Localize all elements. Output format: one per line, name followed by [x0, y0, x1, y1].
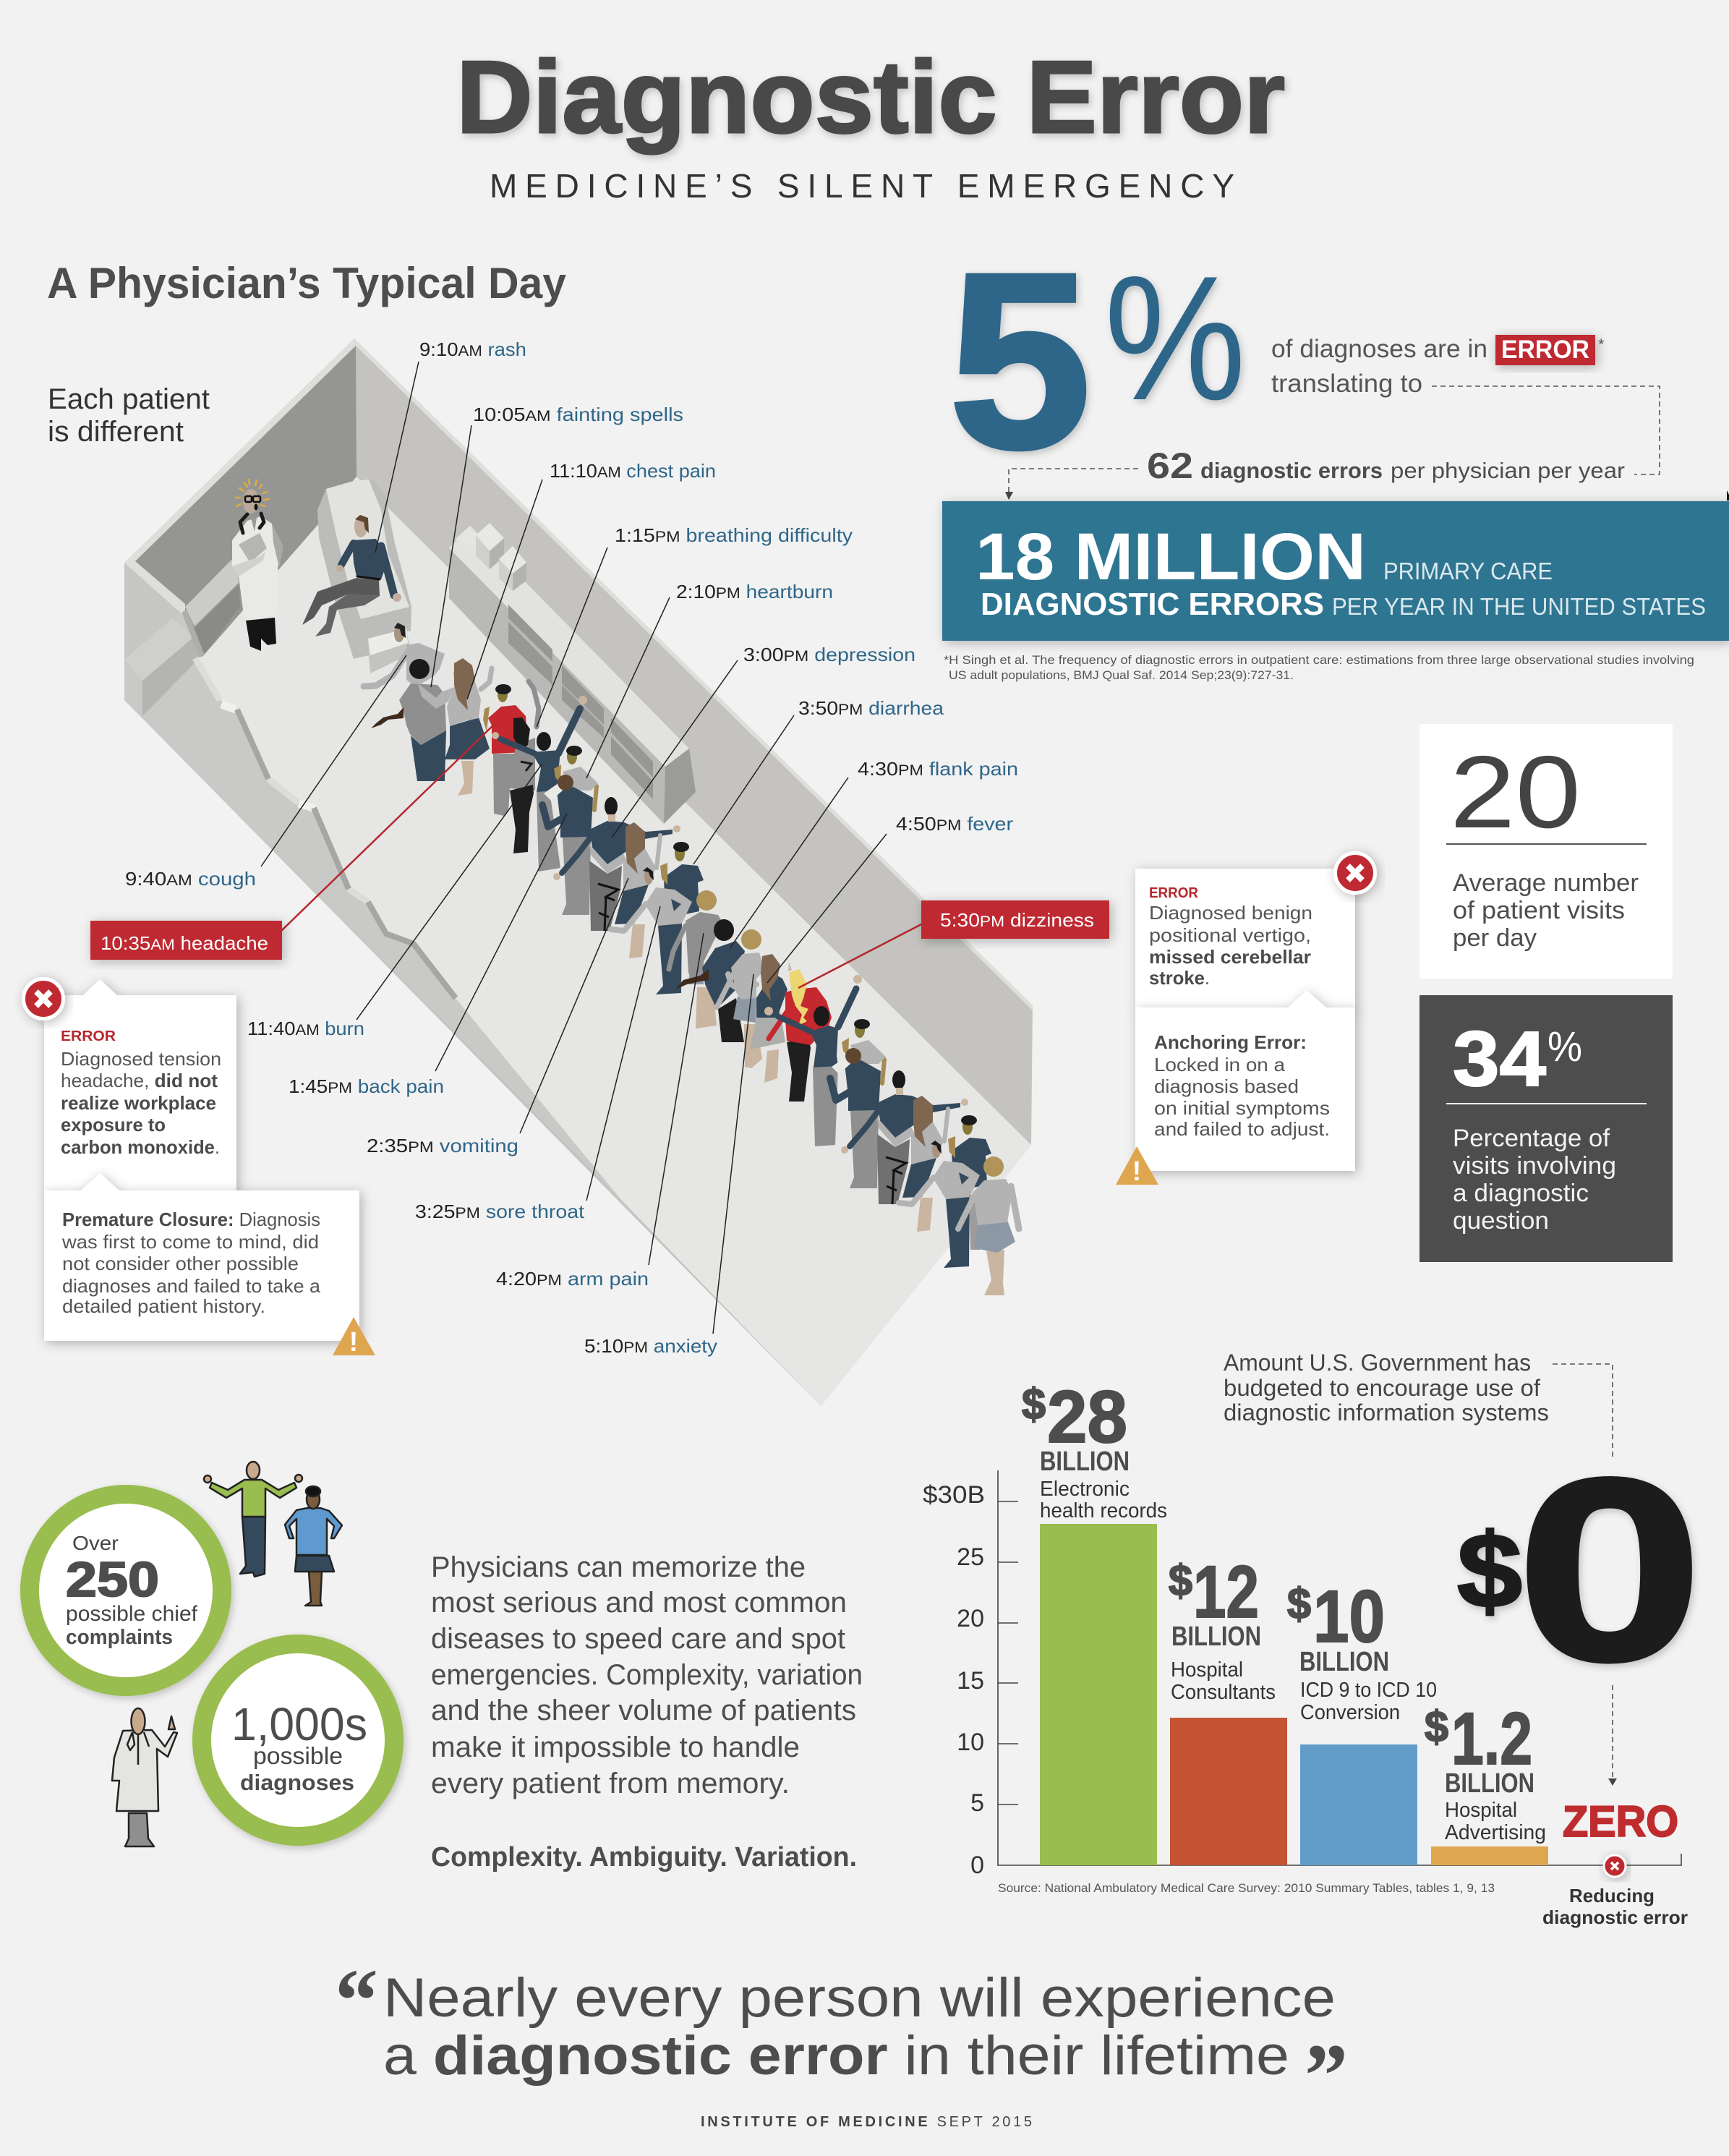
bar: hospital consultants: 12 [1193, 1551, 1259, 1633]
circle: 250 complaints [30, 1494, 222, 1687]
column: zero: ZERO [1563, 1797, 1678, 1846]
paragraph: memorize: most serious and most common [431, 1587, 847, 1619]
text: of diagnoses are in error: of diagnoses are in [1271, 335, 1487, 363]
timeline label: 3:50pm diarrhea [693, 697, 944, 864]
bar: hospital advertising: Advertising [1445, 1821, 1546, 1844]
bar: electronic health records: health records [1040, 1499, 1167, 1522]
timeline label: 4:20pm arm pain: 4:20 PM arm pain [496, 1268, 649, 1290]
banner: 18 million: PER YEAR IN THE UNITED STATES [1332, 593, 1706, 620]
text: amount budgeted: diagnostic information systems [1224, 1399, 1549, 1426]
timeline label: 5:10pm anxiety: 5:10PM anxiety [584, 1335, 717, 1357]
dashed arrow: down to zero [1608, 1685, 1617, 1786]
timeline label: 2:35pm vomiting [367, 878, 628, 1156]
closing quote: a diagnostic error in their lifetime [383, 2025, 1289, 2087]
patient: curly blond grey shirt [669, 890, 723, 1028]
banner: 18 million: 18 MILLION [976, 520, 1366, 594]
circle: 250 complaints: possible chief [66, 1602, 198, 1626]
bar: hospital advertising: 1.2 [1451, 1697, 1532, 1780]
card: anchoring error [1135, 990, 1355, 1171]
text: amount budgeted [1224, 1350, 1549, 1426]
doctor figure [232, 480, 283, 651]
circle: 1000s diagnoses [202, 1644, 394, 1836]
icon: man with arms out [204, 1462, 302, 1577]
big stat: 5 percent [949, 222, 1246, 500]
icon: warning right [1116, 1146, 1158, 1187]
patient: navy arms raised [764, 975, 862, 1146]
patient queue [364, 623, 1019, 1295]
text: each patient is different: is different [48, 416, 184, 448]
bar: hospital advertising: Hospital [1445, 1799, 1517, 1822]
bar: hospital consultants: $ [1169, 1556, 1192, 1605]
patient: navy shirt black pants [675, 919, 745, 1042]
icon: error x left [23, 979, 64, 1018]
stat card: 20 visits: 20 [1450, 735, 1581, 850]
axis and ticks: 15 [957, 1667, 984, 1695]
column: zero: diagnostic error [1542, 1906, 1688, 1928]
bar: icd conversion: ICD 9 to ICD 10 [1300, 1679, 1437, 1702]
bar: icd conversion: Conversion [1300, 1701, 1400, 1724]
card: headache error: exposure to [61, 1114, 166, 1135]
timeline label: 2:10pm heartburn [586, 581, 833, 778]
bar: icd conversion [1287, 1575, 1437, 1865]
paragraph: memorize: every patient from memory. [431, 1768, 790, 1799]
timeline label: 11:10am chest pain: 11:10AM chest pain [550, 460, 716, 482]
stat card: 20 visits: of patient visits [1453, 897, 1625, 924]
closing quote [335, 1951, 1348, 2126]
card: anchoring error: Anchoring Error: [1154, 1031, 1307, 1053]
patient: woman long hair [418, 658, 492, 796]
card: anchoring error: diagnosis based [1154, 1075, 1299, 1097]
circle: 1000s diagnoses: diagnoses [240, 1770, 354, 1795]
card: dizziness error: stroke. [1149, 967, 1210, 989]
card: headache error: Diagnosed tension [61, 1048, 221, 1070]
text: amount budgeted: Amount U.S. Government has [1224, 1350, 1531, 1376]
axis and ticks: 20 [957, 1605, 984, 1632]
timeline label: 4:20pm arm pain [496, 933, 704, 1290]
card: headache error: carbon monoxide. [61, 1136, 220, 1158]
bar: hospital advertising [1425, 1697, 1548, 1865]
repeating patient group [542, 746, 704, 994]
card: premature closure: detailed patient history. [62, 1295, 265, 1317]
callout: 5:30pm dizziness: 5:30PM dizziness [940, 909, 1094, 931]
card: dizziness error: ERROR [1149, 885, 1199, 901]
patient: red shirt [483, 684, 535, 816]
seated patient [302, 515, 401, 636]
card: anchoring error: on initial symptoms [1154, 1097, 1330, 1119]
axis and ticks: $30B [923, 1481, 985, 1509]
stat card: 20 visits: per day [1453, 924, 1537, 952]
bar: electronic health records: $ [1022, 1380, 1046, 1428]
axis and ticks: 25 [957, 1543, 984, 1571]
icon: doctor [112, 1708, 177, 1846]
card: headache error: realize workplace [61, 1092, 216, 1114]
timeline label: 9:10am rash [375, 338, 526, 553]
timeline label: 3:50pm diarrhea: 3:50PM diarrhea [798, 697, 944, 719]
card: anchoring error: and failed to adjust. [1154, 1118, 1330, 1140]
timeline label: 11:10am chest pain [467, 460, 716, 699]
patient: blonde in red, dizziness [769, 962, 832, 1102]
banner: 18 million [942, 490, 1729, 641]
timeline label: 11:40am burn [247, 764, 542, 1039]
circle: 250 complaints: Over [72, 1532, 119, 1554]
bar: hospital consultants: Hospital [1171, 1658, 1243, 1682]
banner: 18 million: PRIMARY CARE [1383, 558, 1553, 584]
card: dizziness error: positional vertigo, [1149, 924, 1311, 946]
bar: hospital advertising: $ [1425, 1703, 1448, 1751]
axis and ticks: 10 [957, 1729, 984, 1756]
patient: blond light shirt [717, 929, 764, 1068]
text: of diagnoses are in error: ERROR [1501, 336, 1589, 364]
exam chair [317, 480, 411, 673]
subtitle: MEDICINE’S SILENT EMERGENCY [490, 167, 1234, 205]
big stat: zero dollars: 0 [1516, 1425, 1703, 1714]
circle: 250 complaints: complaints [66, 1626, 173, 1649]
patient: black pants, long hair [510, 681, 539, 853]
callout: 5:30pm dizziness [798, 900, 1109, 988]
stat card: 34 percent: Percentage of [1453, 1125, 1610, 1152]
card: dizziness error: Diagnosed benign [1149, 902, 1312, 924]
column: zero [1542, 1797, 1688, 1928]
axis and ticks: 5 [970, 1789, 984, 1817]
stat card: 20 visits [1420, 724, 1673, 979]
text: each patient is different [48, 383, 210, 448]
timeline label: 4:50pm fever [767, 813, 1013, 983]
card: dizziness error: missed cerebellar [1149, 946, 1311, 968]
dashed connector: to zero [1553, 1364, 1613, 1459]
timeline label: 4:50pm fever: 4:50PM fever [896, 813, 1013, 835]
paragraph: memorize: and the sheer volume of patients [431, 1695, 856, 1726]
big stat: zero dollars [1457, 1425, 1703, 1714]
timeline label: 4:30pm flank pain [730, 758, 1018, 947]
card: premature closure: was first to come to mind, did [61, 1231, 319, 1253]
timeline label: 3:25pm sore throat: 3:25PM sore throat [415, 1201, 585, 1222]
paragraph: memorize [431, 1551, 863, 1799]
card: dizziness error [1135, 869, 1355, 1010]
bar: electronic health records: 28 [1047, 1376, 1127, 1458]
stat card: 20 visits: Average number [1453, 869, 1639, 897]
timeline label: 5:10pm anxiety [584, 974, 753, 1357]
quote source: INSTITUTE OF MEDICINE SEPT 2015 [701, 2114, 1032, 2130]
card: headache error: headache, did not [61, 1070, 218, 1091]
bar: hospital advertising: BILLION [1445, 1768, 1534, 1799]
timeline label: 3:00pm depression: 3:00PM depression [743, 644, 915, 665]
icon: warning left [333, 1317, 375, 1358]
text: of diagnoses are in error: * [1598, 336, 1605, 354]
paragraph: memorize: diseases to speed care and spot [431, 1623, 845, 1655]
text: 62 diagnostic errors per physician: 62 [1147, 446, 1193, 486]
timeline label: 3:25pm sore throat [415, 906, 660, 1222]
axis and ticks [923, 1470, 1681, 1879]
footnote: US adult populations, BMJ Qual Saf. 2014 Sep;23(9):727-31. [949, 668, 1294, 682]
circle: 1000s diagnoses: 1,000s [231, 1698, 367, 1750]
banner: 18 million: DIAGNOSTIC ERRORS [981, 587, 1324, 622]
icon: warning right: ! [1132, 1156, 1141, 1187]
timeline label: 1:15pm breathing difficulty [537, 524, 853, 727]
stat card: 34 percent: question [1453, 1207, 1549, 1235]
footnote [944, 653, 1694, 682]
bar chart [923, 1376, 1688, 1928]
bar: hospital consultants: BILLION [1171, 1622, 1261, 1652]
stat card: 34 percent: % [1547, 1023, 1582, 1070]
text: 62 diagnostic errors per physician [1147, 446, 1625, 486]
circle: 1000s diagnoses: possible [253, 1742, 343, 1769]
stat card: 34 percent [1420, 995, 1673, 1262]
counter [449, 523, 696, 824]
card: premature closure: not consider other possible [62, 1253, 299, 1274]
dashed connector: to 62 errors [1432, 386, 1660, 474]
closing quote: Nearly every person will experience [383, 1967, 1336, 2029]
card: premature closure: Premature Closure: Diagnosis [62, 1209, 320, 1230]
source note: Source: National Ambulatory Medical Care Survey: 2010 Summary Tables, tables 1, 9, 13 [998, 1881, 1495, 1895]
timeline label: 10:05am fainting spells [431, 404, 683, 687]
axis and ticks: 0 [970, 1852, 984, 1879]
circle: 250 complaints: 250 [66, 1552, 159, 1607]
text: complexity ambiguity variation: Complexity. Ambiguity. Variation. [431, 1842, 857, 1872]
timeline label: 9:40am cough [125, 655, 406, 890]
timeline label: 10:05am fainting spells: 10:05 AM fainting spells [473, 404, 683, 425]
bar: icd conversion: $ [1287, 1580, 1311, 1628]
closing quote: “ [335, 1951, 378, 2051]
bar: icd conversion: 10 [1313, 1575, 1385, 1658]
bar: electronic health records: BILLION [1040, 1446, 1130, 1477]
section heading: A Physician’s Typical Day [47, 259, 567, 307]
timeline label: 1:45pm back pain [289, 814, 567, 1097]
timeline label: 9:40am cough: 9:40 AM cough [125, 868, 256, 890]
callout: 10:35am headache: 10:35AM headache [101, 932, 268, 954]
paragraph: memorize: Physicians can memorize the [431, 1551, 806, 1583]
patient: man in light shirt [364, 623, 445, 687]
bar: electronic health records: Electronic [1040, 1478, 1130, 1501]
bar: electronic health records [1022, 1376, 1167, 1865]
bar: icd conversion: BILLION [1299, 1647, 1389, 1677]
text: each patient is different: Each patient [48, 383, 210, 415]
timeline label: 2:10pm heartburn: 2:10PM heartburn [676, 581, 833, 602]
card: headache error [44, 979, 236, 1193]
icon: error x right [1335, 853, 1375, 892]
timeline label: 4:30pm flank pain: 4:30 PM flank pain [858, 758, 1018, 780]
timeline label: 1:15pm breathing difficulty: 1:15PM breathing difficulty [615, 524, 853, 546]
card: premature closure: diagnoses and failed to take a [62, 1275, 321, 1297]
big stat: 5 percent: % [1104, 239, 1246, 437]
column: zero: Reducing [1569, 1885, 1655, 1906]
timeline label: 1:45pm back pain: 1:45PM back pain [289, 1075, 444, 1097]
timeline label: 11:40am burn: 11:40AM burn [247, 1018, 364, 1039]
card: anchoring error: Locked in on a [1154, 1054, 1286, 1075]
text: of diagnoses are in error: translating to [1271, 370, 1422, 398]
paragraph: memorize: emergencies. Complexity, variation [431, 1659, 863, 1691]
icon: warning left: ! [349, 1327, 358, 1358]
big stat: zero dollars: $ [1457, 1512, 1522, 1629]
icon: woman in blue [285, 1486, 342, 1606]
text: amount budgeted: budgeted to encourage use of [1224, 1375, 1540, 1401]
card: headache error: ERROR [61, 1028, 116, 1044]
dashed arrow: to 18 million [1005, 469, 1138, 500]
text: 62 diagnostic errors per physician: per physician per year [1391, 458, 1625, 483]
closing quote: ” [1305, 2027, 1348, 2126]
callout: 10:35am headache [90, 725, 494, 960]
patient: arms raised [492, 696, 587, 872]
patient: curly hair grey shirt [371, 659, 446, 781]
bar: hospital consultants: Consultants [1171, 1681, 1276, 1704]
text: 62 diagnostic errors per physician: diagnostic errors [1200, 458, 1383, 483]
timeline label: 9:10am rash: 9:10AM rash [419, 338, 526, 360]
paragraph: memorize: make it impossible to handle [431, 1731, 800, 1763]
stat card: 34 percent: visits involving [1453, 1152, 1616, 1180]
big stat: 5 percent: 5 [949, 222, 1091, 500]
patient: brown hair grey skirt [750, 954, 787, 1083]
timeline label: 2:35pm vomiting: 2:35 PM vomiting [367, 1135, 518, 1156]
stat card: 34 percent: 34 [1453, 1015, 1546, 1102]
patient group repeated [830, 1019, 991, 1268]
patient: last woman in line [958, 1156, 1019, 1295]
stat card: 34 percent: a diagnostic [1453, 1180, 1589, 1207]
title: Diagnostic Error [456, 40, 1285, 155]
card: premature closure [44, 1173, 359, 1341]
isometric exam room [124, 338, 1033, 1406]
bar: hospital consultants [1169, 1551, 1287, 1865]
timeline label: 3:00pm depression [612, 644, 915, 838]
text: of diagnoses are in error [1271, 335, 1605, 398]
footnote: *H Singh et al. The frequency of diagnostic errors in outpatient care: estimations from three large observational studies involving [944, 653, 1694, 667]
